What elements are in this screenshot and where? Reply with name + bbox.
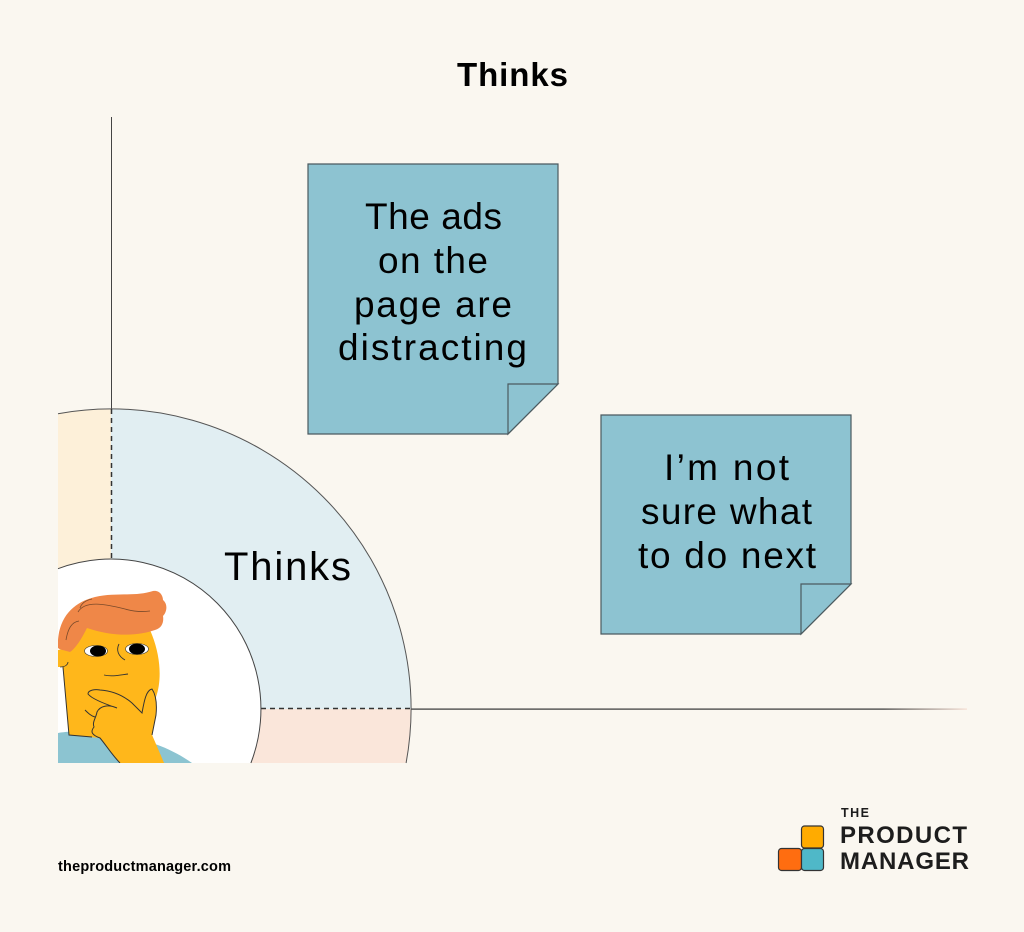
hair	[58, 591, 166, 652]
nose and mouth	[118, 644, 125, 660]
note text: The ads	[365, 196, 502, 237]
ear	[58, 650, 68, 667]
logo blocks	[802, 826, 824, 848]
note fold	[801, 584, 851, 634]
note text	[638, 447, 817, 576]
sticky note: next	[601, 415, 851, 634]
note text: distracting	[338, 327, 527, 368]
quadrant diagram	[58, 409, 411, 763]
note text: sure what	[641, 491, 813, 532]
sticky note: ads	[308, 164, 558, 434]
diagram label: Thinks	[224, 545, 351, 589]
logo	[778, 806, 969, 875]
title: Thinks	[457, 56, 568, 93]
logo wordmark: PRODUCT	[840, 822, 967, 849]
segment: thinks quadrant	[111, 409, 411, 709]
logo wordmark: MANAGER	[840, 848, 969, 875]
segment: bottom-right quadrant	[251, 709, 411, 763]
note text: to do next	[638, 535, 817, 576]
note text: page are	[354, 284, 512, 325]
footer url: theproductmanager.com	[58, 859, 231, 875]
note text	[338, 196, 527, 368]
note fold	[508, 384, 558, 434]
note text: on the	[378, 240, 488, 281]
logo wordmark: THE	[841, 806, 869, 820]
face	[62, 625, 164, 763]
hand	[110, 701, 164, 763]
outer arc	[58, 409, 411, 763]
inner arc	[58, 559, 261, 763]
segment: top-left quadrant	[58, 409, 111, 569]
logo wordmark	[840, 806, 969, 875]
dashed dividers	[112, 409, 411, 708]
icon: thinking person	[58, 591, 192, 763]
vertical axis	[110, 117, 112, 409]
shoulders	[58, 731, 192, 763]
eyes	[84, 646, 108, 656]
horizontal axis	[411, 708, 967, 710]
inner white circle	[58, 559, 261, 763]
note text: I’m not	[664, 447, 790, 488]
